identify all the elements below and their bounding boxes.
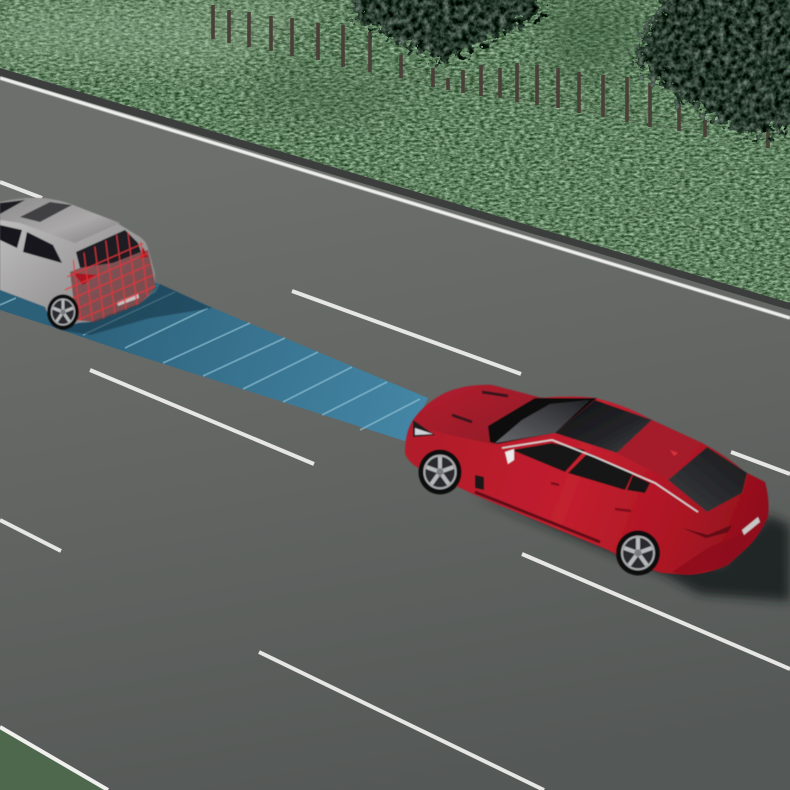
- number plate: [742, 517, 760, 535]
- silver car rear window: [76, 230, 141, 268]
- hood vents: [452, 392, 508, 422]
- silver car roof: [0, 198, 120, 243]
- shadow: silver car: [60, 284, 212, 335]
- grass corner bottom left: [0, 728, 108, 790]
- windshield cowl: [488, 398, 597, 444]
- rear window: [668, 447, 747, 512]
- background: grass verge: [0, 0, 790, 315]
- silver car plate: [117, 293, 139, 306]
- lane markings: [0, 182, 790, 790]
- car: red sedan: [405, 385, 769, 575]
- rear bumper shade: [672, 530, 750, 575]
- trees: [350, 0, 790, 135]
- road edge line bottom: [0, 727, 108, 790]
- silver car side windows: [0, 225, 62, 263]
- windshield glass: [495, 400, 590, 443]
- headlamp: [413, 420, 435, 437]
- silver car tail lights: [73, 247, 148, 285]
- car: silver hatchback with red radar grid: [0, 198, 160, 340]
- sunroof: [555, 400, 652, 453]
- red car hood: [413, 385, 542, 445]
- side windows: [512, 443, 650, 493]
- road kerb: [0, 68, 790, 310]
- chrome trim: [502, 440, 698, 512]
- wheels: [418, 450, 462, 494]
- silver car sunroof: [20, 202, 72, 222]
- radar grid: [64, 232, 156, 322]
- door handles and side sill: [551, 483, 631, 511]
- rear roof: [617, 420, 702, 480]
- silver car rear red haze: [70, 250, 156, 322]
- mirror: [505, 449, 514, 464]
- tail light: [682, 525, 732, 538]
- shadow: red car: [470, 495, 790, 601]
- sensor beam: [0, 283, 428, 442]
- red car body: [405, 385, 769, 575]
- silver car wheel: [47, 294, 79, 330]
- road edge line top: [0, 78, 790, 318]
- fence: [213, 5, 768, 148]
